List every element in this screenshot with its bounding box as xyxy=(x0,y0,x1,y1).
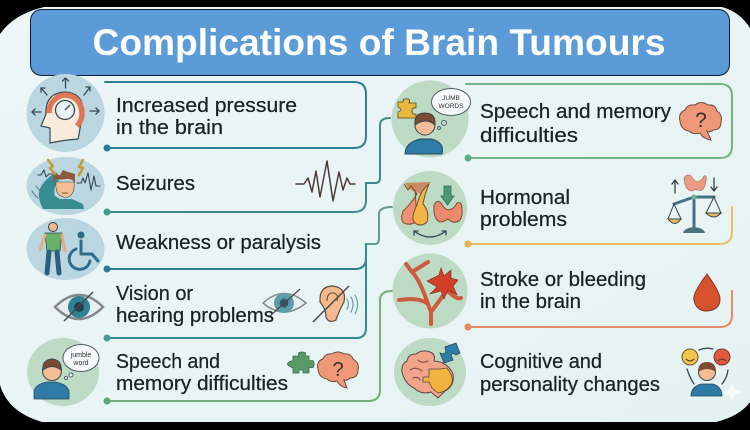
item: speech and memory, right xyxy=(392,80,732,162)
item: hormonal xyxy=(393,171,732,248)
icon: crossed ear xyxy=(313,286,358,322)
label: Seizures xyxy=(116,173,195,195)
icon: person holding head xyxy=(26,157,104,215)
icon: thyroid and balance scale xyxy=(668,175,721,233)
icon: EEG wave xyxy=(296,161,355,201)
icon: brain with question mark: ? xyxy=(332,359,344,381)
icon: bleeding vessel xyxy=(392,254,468,328)
title banner: Complications of Brain Tumours xyxy=(92,22,666,63)
item: vision or hearing xyxy=(55,283,358,327)
item: seizures xyxy=(26,157,355,215)
title banner xyxy=(30,10,730,76)
label: Hormonal xyxy=(480,187,570,209)
icon: person with jumb words bubble: WORDS xyxy=(439,103,464,110)
icon: brain and puzzle xyxy=(394,338,466,406)
icon: person with jumb words bubble: JUMB xyxy=(442,95,460,102)
item: speech and memory, right: difficulties xyxy=(480,125,578,147)
item: hormonal: problems xyxy=(480,209,567,231)
label: Increased pressure xyxy=(116,95,297,117)
icon: brain with question mark: ? xyxy=(695,109,707,132)
item: stroke: in the brain xyxy=(480,291,581,313)
icon: person with jumbled word bubble xyxy=(27,338,99,406)
item: increased pressure: in the brain xyxy=(116,117,223,139)
icon: figure and wheelchair xyxy=(26,218,104,280)
item: increased pressure xyxy=(26,74,297,152)
icon: person with jumbled word bubble: jumble xyxy=(70,352,91,359)
icon: brain with question mark xyxy=(318,352,358,388)
label: Speech and memory xyxy=(480,101,671,123)
icon: sparkle watermark xyxy=(721,381,743,403)
icon: glands with arrows xyxy=(393,171,467,245)
label: Stroke or bleeding xyxy=(480,269,646,291)
label: Speech and xyxy=(116,351,220,373)
item: speech and memory, left: memory difficulties xyxy=(116,373,288,395)
icon: green puzzle piece xyxy=(288,352,314,373)
label: Cognitive and xyxy=(480,351,602,373)
item: vision or hearing: hearing problems xyxy=(116,305,274,327)
icon: brain with question mark xyxy=(680,102,722,140)
label: Weakness or paralysis xyxy=(116,232,321,254)
item: speech and memory, left xyxy=(27,338,358,406)
connector lines xyxy=(105,82,392,401)
icon: head with pressure gauge xyxy=(26,74,104,152)
icon: small crossed eye xyxy=(263,289,306,316)
item: weakness xyxy=(26,218,321,280)
icon: crossed eye xyxy=(55,292,103,321)
icon: person with jumbled word bubble: word xyxy=(72,360,89,367)
item: cognitive: personality changes xyxy=(480,374,660,396)
item: stroke xyxy=(392,254,732,330)
label: Vision or xyxy=(116,283,193,305)
icon: blood drop xyxy=(694,274,720,311)
icon: person with jumb words bubble xyxy=(392,80,470,158)
icon: mood change person xyxy=(682,348,730,396)
connector dots xyxy=(104,144,110,404)
item: cognitive xyxy=(394,338,743,406)
